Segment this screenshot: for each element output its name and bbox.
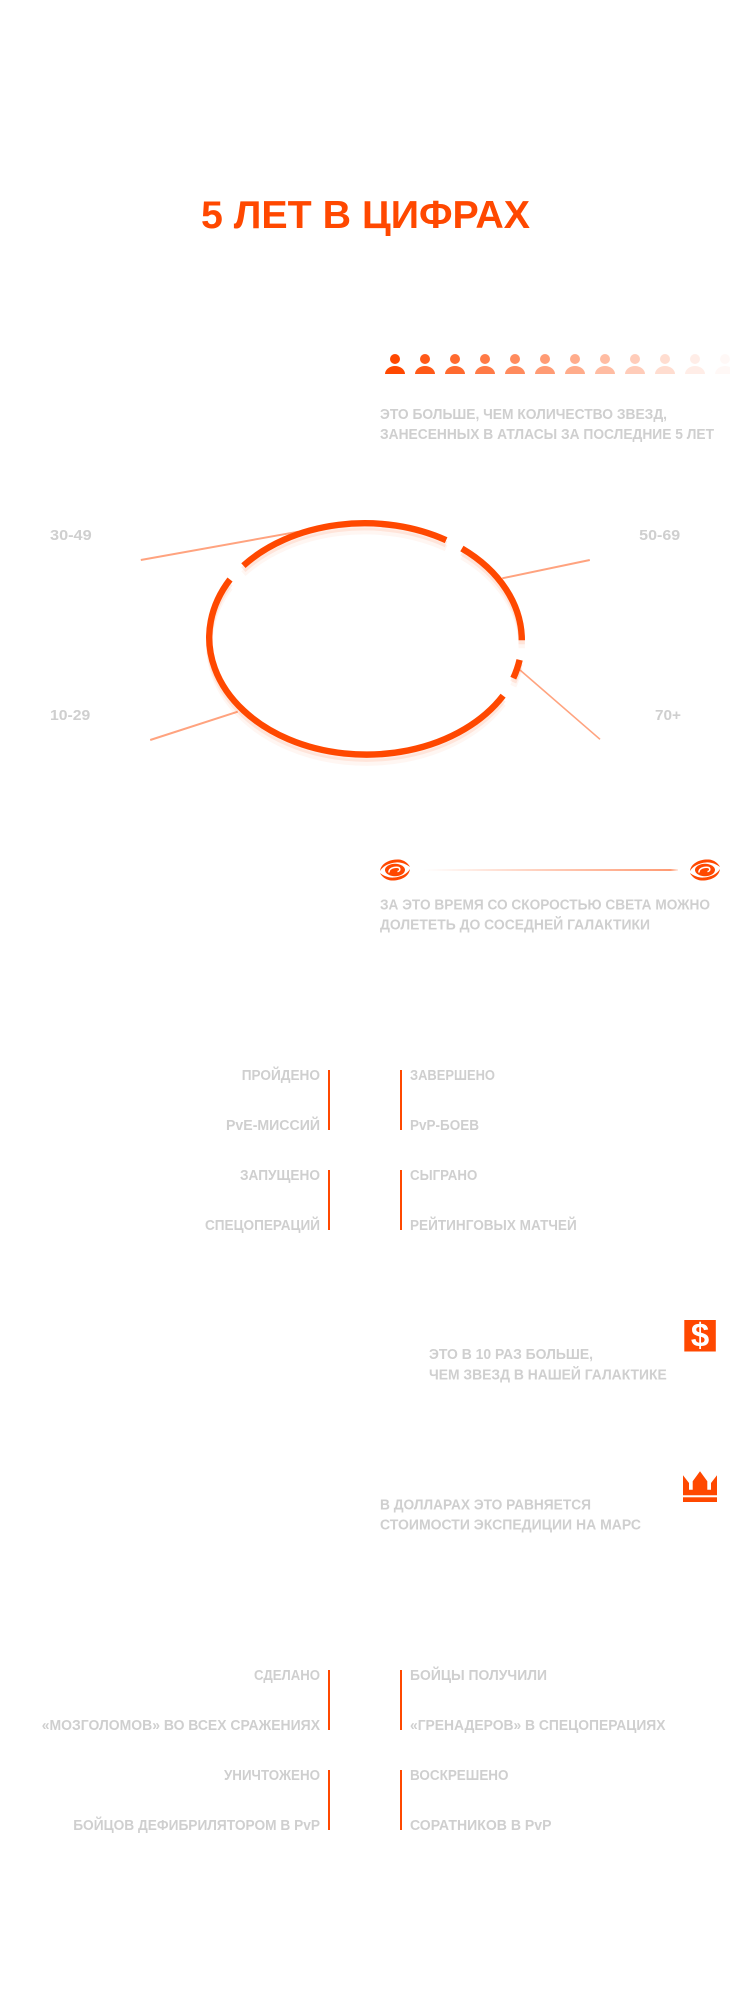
leader line: 50-69 [502,560,590,578]
text: light speed [380,897,710,933]
ring segment: 70+ [513,660,520,678]
text: stars comparison: ЗАНЕСЕННЫХ В АТЛАСЫ ЗА ПОСЛЕДНИЕ 5 ЛЕТ [380,427,714,443]
stat: revived comrades [400,1768,552,1834]
label: 10-29: 10-29 [50,708,90,724]
leader line: 10-29 [150,712,238,740]
text: ten times more: ЭТО В 10 РАЗ БОЛЬШЕ, [429,1347,593,1363]
stat: grenadiers: БОЙЦЫ ПОЛУЧИЛИ [410,1666,547,1684]
icon: crown [683,1471,717,1502]
text: mars expedition: В ДОЛЛАРАХ ЭТО РАВНЯЕТСЯ [380,1497,591,1513]
text: stars comparison: ЭТО БОЛЬШЕ, ЧЕМ КОЛИЧЕСТВО ЗВЕЗД, [380,407,667,423]
icon: person 6 [535,354,555,374]
icon: person 8 [595,354,615,374]
stat: PvE missions: PvE-МИССИЙ [226,1116,320,1134]
stat: defibrillator kills [73,1768,330,1834]
text: mars expedition: СТОИМОСТИ ЭКСПЕДИЦИИ НА МАРС [380,1517,642,1533]
stat: special operations [205,1168,330,1234]
stat: special operations: СПЕЦОПЕРАЦИЙ [205,1216,320,1234]
stat: brainbreakers: СДЕЛАНО [254,1668,320,1684]
icon: person 11 [685,354,705,374]
stat: brainbreakers: «МОЗГОЛОМОВ» ВО ВСЕХ СРАЖЕНИЯХ [42,1718,320,1734]
text: ten times more: ЧЕМ ЗВЕЗД В НАШЕЙ ГАЛАКТИКЕ [429,1365,667,1383]
icon: dollar: $ [691,1316,709,1354]
age ring chart [209,523,522,763]
title: 5 ЛЕТ В ЦИФРАХ [201,194,530,237]
stat: ranked matches: СЫГРАНО [410,1168,477,1184]
gradient line between galaxies [423,869,678,871]
icon: galaxy right [690,859,720,881]
ring segment: 50-69 [462,548,522,640]
stat: special operations: ЗАПУЩЕНО [240,1168,320,1184]
icon: person 10 [655,354,675,374]
people icon row [385,354,730,374]
stat: defibrillator kills: БОЙЦОВ ДЕФИБРИЛЯТОРОМ В PvP [73,1816,320,1834]
text: light speed: ДОЛЕТЕТЬ ДО СОСЕДНЕЙ ГАЛАКТИКИ [380,915,650,933]
stat: PvE missions: ПРОЙДЕНО [242,1066,320,1084]
stat: PvP battles [400,1068,495,1134]
stat: PvP battles: PvP-БОЕВ [410,1118,479,1134]
stat: PvP battles: ЗАВЕРШЕНО [410,1068,495,1084]
text: mars expedition [380,1497,642,1533]
stat: brainbreakers [42,1668,330,1734]
stat: grenadiers: «ГРЕНАДЕРОВ» В СПЕЦОПЕРАЦИЯХ [410,1718,666,1734]
stat: ranked matches: РЕЙТИНГОВЫХ МАТЧЕЙ [410,1216,577,1234]
icon: person 2 [415,354,435,374]
icon: person 1 [385,354,405,374]
icon: galaxy left [380,859,410,881]
icon: person 9 [625,354,645,374]
stat: PvE missions [226,1066,330,1134]
text: stars comparison [380,407,714,443]
icon: person 3 [445,354,465,374]
leader line: 30-49 [141,532,298,560]
label: 50-69: 50-69 [639,528,680,544]
stat: defibrillator kills: УНИЧТОЖЕНО [224,1768,320,1784]
icon: person 7 [565,354,585,374]
label: 30-49: 30-49 [50,528,92,544]
icon: person 12 [715,354,730,374]
text: light speed: ЗА ЭТО ВРЕМЯ СО СКОРОСТЬЮ СВЕТА МОЖНО [380,897,710,913]
icon: person 4 [475,354,495,374]
leader line: 70+ [520,670,600,739]
stat: revived comrades: ВОСКРЕШЕНО [410,1768,508,1784]
ring segment: 30-49 [243,523,446,566]
text: ten times more [429,1347,667,1383]
label: 70+: 70+ [655,708,681,724]
icon: dollar [684,1316,716,1354]
stat: ranked matches [400,1168,577,1234]
stat: revived comrades: СОРАТНИКОВ В PvP [410,1818,552,1834]
stat: grenadiers [400,1666,666,1734]
icon: person 5 [505,354,525,374]
ring segment: 10-29 [209,580,503,755]
